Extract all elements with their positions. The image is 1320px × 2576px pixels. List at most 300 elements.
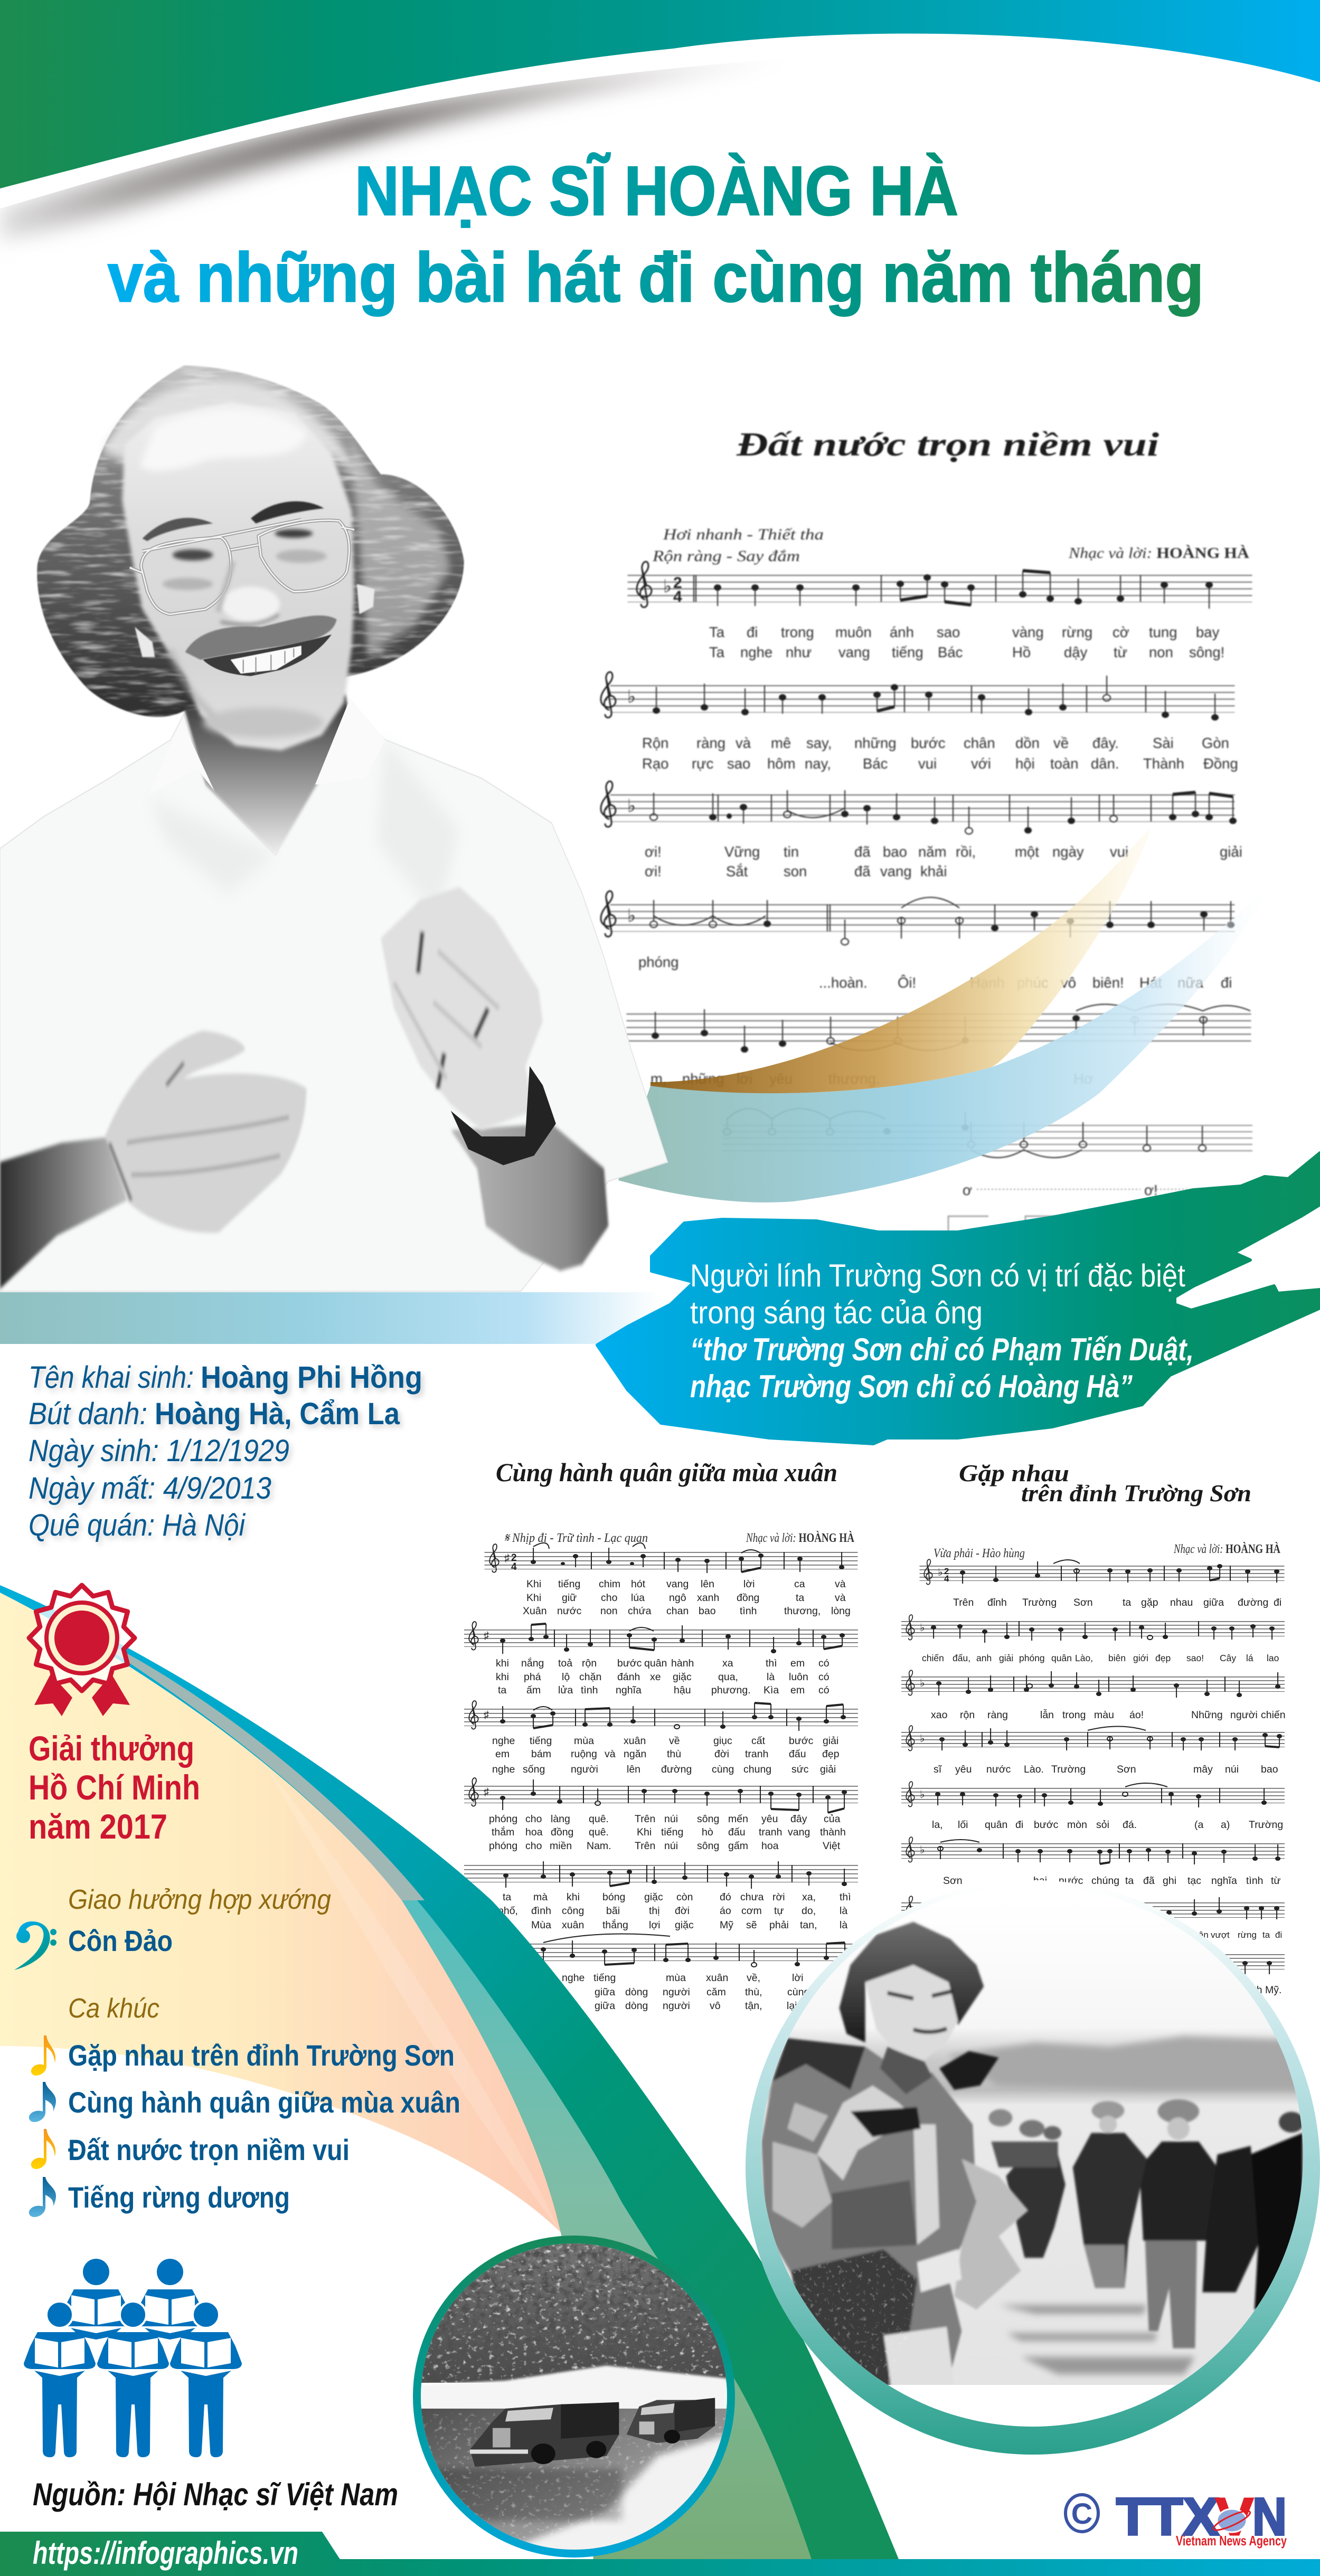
- sheet music: Gặp nhau trên đỉnh Trường Sơn: Gặp nhau: [959, 1460, 1069, 1486]
- sheet music: Đất nước trọn niềm vui: bước: [911, 735, 946, 751]
- sheet music: Cùng hành quân giữa mùa xuân: nghe: [492, 1735, 515, 1747]
- sheet music: Đất nước trọn niềm vui: Nhạc và lời: HOÀNG HÀ: [1068, 544, 1249, 562]
- sheet music: Cùng hành quân giữa mùa xuân: tiếng: [530, 1735, 552, 1747]
- sheet music: Gặp nhau trên đỉnh Trường Sơn: rừng: [1238, 1930, 1257, 1940]
- sheet music: Cùng hành quân giữa mùa xuân: tiếng: [558, 1578, 580, 1590]
- sheet music: Đất nước trọn niềm vui: dậy: [1064, 644, 1088, 660]
- sheet music: Cùng hành quân giữa mùa xuân: qua,: [718, 1671, 738, 1683]
- icon: blue note: [29, 2177, 56, 2217]
- sheet music: Gặp nhau trên đỉnh Trường Sơn: la,: [932, 1819, 943, 1831]
- sheet music: Gặp nhau trên đỉnh Trường Sơn: quân: [985, 1819, 1007, 1831]
- sheet music: Gặp nhau trên đỉnh Trường Sơn: chiến: [1261, 1709, 1286, 1721]
- sheet music: Cùng hành quân giữa mùa xuân: xuân: [624, 1735, 646, 1747]
- shirt: [0, 702, 667, 1291]
- eyes: [163, 529, 326, 590]
- agency wordmark: TTX: [1116, 2487, 1219, 2546]
- sheet music: Cùng hành quân giữa mùa xuân: đường: [661, 1764, 692, 1775]
- sheet music: Gặp nhau trên đỉnh Trường Sơn: Lào.: [1024, 1764, 1044, 1775]
- sheet music: Cùng hành quân giữa mùa xuân: lời: [743, 1578, 755, 1590]
- sheet music: Đất nước trọn niềm vui: Ta: [709, 624, 725, 640]
- sheet music: Đất nước trọn niềm vui: Hạnh: [970, 974, 1005, 991]
- sheet music: Đất nước trọn niềm vui: phúc: [1017, 974, 1049, 991]
- sheet music: Gặp nhau trên đỉnh Trường Sơn: xao: [931, 1709, 948, 1721]
- sheet music: Cùng hành quân giữa mùa xuân: vô: [710, 2000, 721, 2012]
- sheet music: Cùng hành quân giữa mùa xuân: tiếng: [661, 1826, 683, 1838]
- icon: orange note: [31, 2129, 55, 2169]
- sheet music: Cùng hành quân giữa mùa xuân: miền: [550, 1840, 572, 1852]
- sheet music: Đất nước trọn niềm vui: cờ: [1112, 624, 1129, 640]
- award text: Hồ Chí Minh: [29, 1768, 200, 1807]
- sheet music: Cùng hành quân giữa mùa xuân: bao: [699, 1605, 716, 1617]
- sheet music: Cùng hành quân giữa mùa xuân: giặc: [675, 1919, 694, 1931]
- sheet music: Gặp nhau trên đỉnh Trường Sơn: 2: [944, 1566, 949, 1576]
- sheet music: Đất nước trọn niềm vui: yêu: [769, 1071, 793, 1087]
- sheet music: Cùng hành quân giữa mùa xuân: sông: [697, 1813, 719, 1825]
- light streaks of right hair wing: [350, 439, 451, 657]
- sheet music: Cùng hành quân giữa mùa xuân: hót: [631, 1578, 646, 1590]
- sheet music: Đất nước trọn niềm vui: non: [1149, 644, 1173, 660]
- light top hair: [101, 380, 359, 478]
- sheet music: Đất nước trọn niềm vui: đã: [854, 844, 871, 860]
- sheet music: Cùng hành quân giữa mùa xuân: đẹp: [822, 1748, 840, 1760]
- sheet music: Đất nước trọn niềm vui: ♭: [627, 687, 636, 707]
- glasses: [130, 519, 354, 614]
- biography text: Hoàng Hà, Cẩm La: [155, 1397, 400, 1431]
- sheet music: Gặp nhau trên đỉnh Trường Sơn: Sơn: [1073, 1597, 1093, 1608]
- sheet music: Gặp nhau trên đỉnh Trường Sơn: giữa: [1203, 1597, 1224, 1608]
- sheet music: Cùng hành quân giữa mùa xuân: lên: [627, 1764, 640, 1775]
- left forearm: [0, 1137, 127, 1289]
- sheet music: Cùng hành quân giữa mùa xuân: thắm: [492, 1826, 514, 1838]
- sheet music: Cùng hành quân giữa mùa xuân: yêu: [761, 1813, 778, 1825]
- sheet music: Đất nước trọn niềm vui: Đất nước trọn niềm vui: [736, 425, 1159, 463]
- icon: blue note: [29, 2082, 56, 2122]
- song 2: Cùng hành quân giữa mùa xuân: [68, 2086, 460, 2119]
- sheet music: Cùng hành quân giữa mùa xuân: tận,: [745, 2000, 762, 2012]
- ears: [135, 584, 374, 657]
- sheet music: Cùng hành quân giữa mùa xuân: thì: [766, 1658, 777, 1669]
- sheet music: Cùng hành quân giữa mùa xuân: căm: [706, 1986, 726, 1998]
- sheet music: Gặp nhau trên đỉnh Trường Sơn: phóng: [1019, 1653, 1045, 1663]
- sheet music: Đất nước trọn niềm vui: Gòn: [1202, 735, 1229, 751]
- sheet music: Gặp nhau trên đỉnh Trường Sơn: ♭: [920, 1844, 925, 1856]
- sheet music: Đất nước trọn niềm vui: tiếng: [892, 644, 923, 660]
- sheet music: Cùng hành quân giữa mùa xuân: là: [840, 1905, 847, 1917]
- sheet music: Đất nước trọn niềm vui: vang: [880, 863, 912, 879]
- title: [108, 152, 1204, 316]
- sheet music: Đất nước trọn niềm vui: như: [786, 644, 812, 660]
- song list: [29, 2035, 460, 2217]
- sheet music: Cùng hành quân giữa mùa xuân: đấu: [789, 1748, 806, 1760]
- sheet music: Cùng hành quân giữa mùa xuân: hoa: [525, 1826, 543, 1838]
- face: [865, 1965, 958, 2060]
- sheet music: Cùng hành quân giữa mùa xuân: bước: [617, 1658, 642, 1669]
- sheet music: Cùng hành quân giữa mùa xuân: và: [835, 1578, 846, 1590]
- sheet music: Cùng hành quân giữa mùa xuân: chung: [743, 1764, 771, 1775]
- truck 1: [470, 2402, 619, 2467]
- sheet music: Gặp nhau trên đỉnh Trường Sơn: ♭: [938, 1567, 942, 1578]
- sheet music: Đất nước trọn niềm vui: với: [971, 755, 991, 772]
- copyright mark: C: [1071, 2497, 1092, 2530]
- sheet music: Cùng hành quân giữa mùa xuân: cho: [525, 1813, 542, 1825]
- sheet music: Đất nước trọn niềm vui: Rạo: [642, 755, 668, 772]
- sheet music: Gặp nhau trên đỉnh Trường Sơn: bao: [1261, 1764, 1278, 1775]
- sheet music: Cùng hành quân giữa mùa xuân: núi: [664, 1813, 678, 1825]
- sheet music: Gặp nhau trên đỉnh Trường Sơn: lẫn: [1040, 1709, 1054, 1721]
- sheet music: Đất nước trọn niềm vui: Rộn ràng - Say đắm: [652, 547, 800, 565]
- sheet music: Cùng hành quân giữa mùa xuân: xa,: [802, 1891, 816, 1903]
- sheet music: Gặp nhau trên đỉnh Trường Sơn: từ: [1271, 1875, 1280, 1887]
- eyebrows: [143, 501, 324, 541]
- sheet music: Đất nước trọn niềm vui: Ta: [709, 644, 725, 660]
- sheet music: Gặp nhau trên đỉnh Trường Sơn: ràng: [987, 1709, 1008, 1721]
- moustache: [185, 615, 337, 660]
- beard and smile lines: [170, 650, 324, 738]
- sheet music: Gặp nhau trên đỉnh Trường Sơn: 4: [944, 1574, 949, 1584]
- sheet music: Cùng hành quân giữa mùa xuân: 𝄋 Nhịp đi - Trữ tình - Lạc quan: [504, 1531, 648, 1545]
- quote text: trong sáng tác của ông: [690, 1295, 983, 1330]
- sheet music: Đất nước trọn niềm vui: một: [1015, 844, 1039, 860]
- sheet music: Gặp nhau trên đỉnh Trường Sơn: chúng: [1091, 1875, 1119, 1887]
- sheet music: Đất nước trọn niềm vui: chân: [964, 735, 995, 751]
- song 1: Gặp nhau trên đỉnh Trường Sơn: [68, 2039, 455, 2072]
- sheet music: Gặp nhau trên đỉnh Trường Sơn: mây: [1193, 1764, 1213, 1775]
- sheet music: Cùng hành quân giữa mùa xuân: mùa: [666, 1972, 686, 1984]
- sheet music: Cùng hành quân giữa mùa xuân: lộ: [562, 1671, 570, 1683]
- foreground soldier: [761, 1922, 1029, 2387]
- sheet music: Đất nước trọn niềm vui: sao: [727, 755, 750, 772]
- face: [122, 402, 374, 751]
- body, hair silhouette and hands: [0, 365, 667, 1291]
- sheet music: Cùng hành quân giữa mùa xuân: làng: [551, 1813, 570, 1825]
- sheet music: Cùng hành quân giữa mùa xuân: Xuân: [523, 1605, 547, 1617]
- sheet music: Đất nước trọn niềm vui: lời: [737, 1071, 752, 1087]
- sheet music: Đất nước trọn niềm vui: tin: [784, 844, 799, 860]
- icon: orange note: [31, 2035, 55, 2076]
- sheet music: Cùng hành quân giữa mùa xuân: lên: [701, 1578, 714, 1590]
- sheet music: Cùng hành quân giữa mùa xuân: cho: [601, 1592, 618, 1604]
- sheet music: Đất nước trọn niềm vui: rực: [692, 755, 714, 772]
- sheet music: Cùng hành quân giữa mùa xuân: chặn: [579, 1671, 601, 1683]
- ribbons over the score: [618, 827, 1269, 1202]
- sheet music: Cùng hành quân giữa mùa xuân: quê.: [589, 1826, 609, 1838]
- sheet music: Đất nước trọn niềm vui: ơi!: [645, 844, 662, 860]
- sheet music: Đất nước trọn niềm vui: Bác: [863, 755, 888, 772]
- sheet music: Gặp nhau trên đỉnh Trường Sơn: Sơn: [943, 1875, 963, 1887]
- soldiers photo circle: [739, 1880, 1320, 2455]
- sheet music: Gặp nhau trên đỉnh Trường Sơn: đi: [1274, 1597, 1281, 1608]
- sheet music: Gặp nhau trên đỉnh Trường Sơn: quân: [1051, 1653, 1072, 1663]
- sheet music: Cùng hành quân giữa mùa xuân: lòng: [831, 1605, 851, 1617]
- sheet music: Cùng hành quân giữa mùa xuân: tiếng: [593, 1972, 616, 1984]
- sheet music: Đất nước trọn niềm vui: vui: [918, 755, 937, 772]
- sheet music: Cùng hành quân giữa mùa xuân: đó: [720, 1891, 731, 1903]
- top curved banner: [0, 0, 1320, 240]
- sheet music: Cùng hành quân giữa mùa xuân: giục: [713, 1735, 732, 1747]
- sheet music: Gặp nhau trên đỉnh Trường Sơn: lá: [1246, 1653, 1253, 1663]
- sheet music: Gặp nhau trên đỉnh Trường Sơn: áo!: [1129, 1709, 1144, 1721]
- sheet music: Đất nước trọn niềm vui: ơ: [963, 1182, 972, 1198]
- sheet music: Cùng hành quân giữa mùa xuân: có: [818, 1658, 829, 1669]
- quote text: [690, 1258, 1194, 1404]
- portrait photo of composer Hoàng Hà: [0, 365, 667, 1291]
- sheet music: Gặp nhau trên đỉnh Trường Sơn: Trường: [1249, 1819, 1283, 1831]
- sheet music: Cùng hành quân giữa mùa xuân: bóng: [602, 1891, 625, 1903]
- sheet music: Cùng hành quân giữa mùa xuân: ta: [503, 1891, 511, 1903]
- sheet music: Cùng hành quân giữa mùa xuân: người: [663, 2000, 690, 2012]
- sheet music: Cùng hành quân giữa mùa xuân: xuân: [562, 1919, 584, 1931]
- sheet music: Cùng hành quân giữa mùa xuân: 4: [511, 1561, 517, 1573]
- sheet music: Cùng hành quân giữa mùa xuân: nắng: [521, 1657, 544, 1669]
- sheet music: Cùng hành quân giữa mùa xuân: đời: [714, 1748, 729, 1760]
- skin: [122, 402, 354, 751]
- sheet music: Cùng hành quân giữa mùa xuân: tranh: [759, 1826, 782, 1838]
- sheet music: Đất nước trọn niềm vui: Hơi nhanh - Thiết tha: [663, 526, 824, 543]
- sheet music: Đất nước trọn niềm vui: từ: [1114, 644, 1127, 660]
- sheet music: Cùng hành quân giữa mùa xuân: Mỹ: [720, 1919, 733, 1931]
- sheet music: Gặp nhau trên đỉnh Trường Sơn: a): [1221, 1819, 1230, 1831]
- sheet music: Cùng hành quân giữa mùa xuân: đánh: [617, 1671, 640, 1683]
- sheet music: Gặp nhau trên đỉnh Trường Sơn: ♭: [920, 1733, 925, 1745]
- sheet music: Cùng hành quân giữa mùa xuân: giữa: [595, 1986, 615, 1998]
- sheet music: Cùng hành quân giữa mùa xuân: chưa: [740, 1891, 764, 1903]
- sheet music: Cùng hành quân giữa mùa xuân: Nhạc và lời: HOÀNG HÀ: [746, 1531, 855, 1545]
- sheet music: Gặp nhau trên đỉnh Trường Sơn: ta: [1123, 1597, 1131, 1608]
- sheet music: Cùng hành quân giữa mùa xuân: lại: [787, 2000, 797, 2012]
- sheet music: Cùng hành quân giữa mùa xuân: Trên: [635, 1813, 655, 1825]
- sheet music: Gặp nhau trên đỉnh Trường Sơn: lối: [958, 1819, 968, 1831]
- sheet music: Đất nước trọn niềm vui: say,: [806, 735, 832, 751]
- sheet music: Cùng hành quân giữa mùa xuân: hậu: [674, 1684, 691, 1696]
- sheet music: Cùng hành quân giữa mùa xuân: xa: [722, 1658, 733, 1669]
- sheet music: Đất nước trọn niềm vui: hôm: [767, 755, 795, 772]
- sheet music: Cùng hành quân giữa mùa xuân: Trên: [635, 1840, 655, 1852]
- sheet music: Đất nước trọn niềm vui: m,: [650, 1071, 667, 1087]
- sheet music: Cùng hành quân giữa mùa xuân: về,: [747, 1972, 760, 1984]
- agency wordmark: [1116, 2487, 1287, 2546]
- sheet music: Cùng hành quân giữa mùa xuân: của: [824, 1813, 841, 1825]
- sheet music: Cùng hành quân giữa mùa xuân: rộn: [582, 1658, 597, 1669]
- sheet music: Gặp nhau trên đỉnh Trường Sơn: màu: [1094, 1709, 1114, 1721]
- collar: [149, 698, 385, 794]
- sheet music: Gặp nhau trên đỉnh Trường Sơn: Trường: [1022, 1597, 1057, 1608]
- sheet music: Cùng hành quân giữa mùa xuân: bãi: [606, 1905, 620, 1917]
- sheet music: Đất nước trọn niềm vui: ánh: [890, 624, 914, 640]
- sheet music: Cùng hành quân giữa mùa xuân: thành: [820, 1826, 846, 1838]
- sheet music: Cùng hành quân giữa mùa xuân: cùng: [712, 1764, 734, 1775]
- sheet music: Gặp nhau trên đỉnh Trường Sơn: nước: [986, 1764, 1011, 1775]
- sheet music: Cùng hành quân giữa mùa xuân: là: [840, 1919, 847, 1931]
- biography text: Ngày mất: 4/9/2013: [29, 1471, 271, 1505]
- sheet music: Đất nước trọn niềm vui: vui: [1110, 844, 1128, 860]
- sheet music: Gặp nhau trên đỉnh Trường Sơn: ghi: [1163, 1875, 1176, 1887]
- sheet music: Cùng hành quân giữa mùa xuân: Kìa: [763, 1684, 779, 1696]
- sheet music: Cùng hành quân giữa mùa xuân: Mùa: [531, 1919, 551, 1931]
- sheet music: Cùng hành quân giữa mùa xuân: cất: [751, 1735, 766, 1747]
- sheet music: Cùng hành quân giữa mùa xuân: em: [790, 1684, 805, 1696]
- sheet music: Gặp nhau trên đỉnh Trường Sơn: ♭: [920, 1903, 925, 1915]
- sheet music: Đất nước trọn niềm vui: những: [854, 735, 897, 751]
- sheet music: Đất nước trọn niềm vui: ngày: [1052, 844, 1084, 860]
- marching soldiers in background: [988, 2099, 1304, 2348]
- quote text: Người lính Trường Sơn có vị trí đặc biệt: [690, 1258, 1185, 1293]
- sheet music: Cùng hành quân giữa mùa xuân: nước: [557, 1605, 582, 1617]
- sheet music: Cùng hành quân giữa mùa xuân: chứa: [628, 1605, 652, 1617]
- sheet music: Gặp nhau trên đỉnh Trường Sơn: đá.: [1123, 1819, 1137, 1831]
- sheet music: Cùng hành quân giữa mùa xuân: lửa: [558, 1684, 573, 1696]
- sheet music: Gặp nhau trên đỉnh Trường Sơn: ♭: [920, 1678, 925, 1689]
- copyright mark: [1066, 2495, 1098, 2532]
- sheet music: Gặp nhau trên đỉnh Trường Sơn: nước: [1059, 1875, 1083, 1887]
- sheet music: Đất nước trọn niềm vui: 2: [673, 574, 682, 592]
- sheet music: Cùng hành quân giữa mùa xuân: quân: [644, 1658, 667, 1669]
- sheet music: Cùng hành quân giữa mùa xuân: xuân: [706, 1972, 728, 1984]
- sheet music: Cùng hành quân giữa mùa xuân: bám: [531, 1748, 551, 1760]
- sheet music: Cùng hành quân giữa mùa xuân: ♯: [484, 1709, 489, 1721]
- sheet music: Đất nước trọn niềm vui: Vững: [724, 844, 760, 860]
- teal to green main sweep: [0, 1585, 899, 2560]
- sheet music: Đất nước trọn niềm vui: dân.: [1091, 755, 1119, 772]
- sheet music: Đất nước trọn niềm vui: những: [682, 1071, 724, 1087]
- sheet music: Gặp nhau trên đỉnh Trường Sơn: núi: [1225, 1764, 1239, 1775]
- sheet music: Cùng hành quân giữa mùa xuân: giải: [820, 1764, 836, 1775]
- sheet music: Đất nước trọn niềm vui: mê: [771, 735, 791, 751]
- sheet music: Cùng hành quân giữa mùa xuân: giải: [823, 1735, 838, 1747]
- sheet music: Cùng hành quân giữa mùa xuân: Nam.: [587, 1840, 611, 1852]
- sheet music: Gặp nhau trên đỉnh Trường Sơn: đã: [1143, 1875, 1155, 1887]
- sheet music: Cùng hành quân giữa mùa xuân: xanh: [697, 1592, 719, 1604]
- nose: [218, 561, 280, 624]
- title: và những bài hát đi cùng năm tháng: [108, 239, 1204, 316]
- biography text: Quê quán: Hà Nội: [29, 1508, 246, 1542]
- sheet music: Đất nước trọn niềm vui: ♭: [627, 796, 636, 816]
- sheet music: Cùng hành quân giữa mùa xuân: hành: [671, 1658, 694, 1669]
- sheet music: Đất nước trọn niềm vui: Hát: [1139, 974, 1162, 991]
- icon: choir: [24, 2259, 242, 2457]
- sheet music: Gặp nhau trên đỉnh Trường Sơn: Trường: [1051, 1764, 1086, 1775]
- sheet music: Đất nước trọn niềm vui: rồi,: [956, 844, 976, 860]
- truck photo circle: [404, 2236, 758, 2559]
- sheet music: Cùng hành quân giữa mùa xuân: và: [605, 1748, 616, 1760]
- sheet music: Cùng hành quân giữa mùa xuân: cho: [525, 1840, 542, 1852]
- sheet music: Đất nước trọn niềm vui: về: [1053, 735, 1069, 751]
- sheet music: Gặp nhau trên đỉnh Trường Sơn: trong: [1062, 1709, 1086, 1721]
- sheet music: Gặp nhau trên đỉnh Trường Sơn: anh Mỹ.: [1245, 1984, 1281, 1996]
- agency name: Vietnam News Agency: [1176, 2533, 1287, 2549]
- sheet music: Cùng hành quân giữa mùa xuân: mà: [533, 1891, 548, 1903]
- sheet music: Cùng hành quân giữa mùa xuân: là: [767, 1671, 775, 1683]
- sheet music: Đất nước trọn niềm vui: đây.: [1092, 735, 1119, 751]
- sheet music: Cùng hành quân giữa mùa xuân: thị: [649, 1905, 660, 1917]
- sheet music: Cùng hành quân giữa mùa xuân: phố,: [498, 1905, 518, 1917]
- sheet music: Cùng hành quân giữa mùa xuân: giặc: [644, 1891, 663, 1903]
- sheet music: Cùng hành quân giữa mùa xuân: đồng: [737, 1592, 759, 1604]
- sheet music: Đất nước trọn niềm vui: ơi!: [645, 863, 662, 879]
- sheet music: Đất nước trọn niềm vui: Thành: [1143, 755, 1184, 772]
- sheet music: Cùng hành quân giữa mùa xuân: ruộng: [571, 1748, 597, 1760]
- sheet music: Gặp nhau trên đỉnh Trường Sơn: Sơn: [1117, 1764, 1136, 1775]
- sheet music: Cùng hành quân giữa mùa xuân: hò: [702, 1826, 713, 1838]
- sheet music: Cùng hành quân giữa mùa xuân: sức: [791, 1764, 809, 1775]
- sheet music: Cùng hành quân giữa mùa xuân: ♯: [484, 1786, 489, 1798]
- sheet music: Gặp nhau trên đỉnh Trường Sơn: vượt: [1211, 1930, 1230, 1940]
- sheet music: Đất nước trọn niềm vui: tung: [1149, 624, 1177, 640]
- sheet music: Gặp nhau trên đỉnh Trường Sơn: ta: [1125, 1875, 1134, 1887]
- quote brush stroke: [597, 1153, 1320, 1444]
- wristwatch strap: [451, 1066, 556, 1165]
- sheet music: Cùng hành quân giữa mùa xuân: thù,: [745, 1986, 762, 1998]
- sheet music: Cùng hành quân giữa mùa xuân: em: [790, 1658, 805, 1669]
- sheet music: Gặp nhau trên đỉnh Trường Sơn: sĩ: [934, 1764, 942, 1775]
- sheet music: Cùng hành quân giữa mùa xuân: phóng: [489, 1813, 517, 1825]
- sheet music: Cùng hành quân giữa mùa xuân: bước: [789, 1735, 814, 1747]
- sheet music: Đất nước trọn niềm vui: nữa: [1177, 974, 1204, 991]
- song: Côn Đảo: Côn Đảo: [68, 1924, 173, 1957]
- sheet music: Gặp nhau trên đỉnh Trường Sơn: tình: [1246, 1875, 1264, 1887]
- left decorative swoosh: [0, 1585, 899, 2560]
- biography text: Hoàng Phi Hồng: [201, 1360, 422, 1395]
- sheet music: Cùng hành quân giữa mùa xuân: tình: [581, 1684, 598, 1696]
- award text: Giải thưởng: [29, 1729, 194, 1768]
- sheet music: Đất nước trọn niềm vui: thương.: [828, 1071, 880, 1087]
- sheet music: Đất nước trọn niềm vui: ♭: [627, 906, 636, 926]
- sheet music: Cùng hành quân giữa mùa xuân: phá: [524, 1671, 541, 1683]
- sheet music: Cùng hành quân giữa mùa xuân: dòng: [625, 1986, 648, 1998]
- sheet music: Cùng hành quân giữa mùa xuân: đồng: [551, 1826, 573, 1838]
- sheet music: Đất nước trọn niềm vui: đi: [747, 624, 758, 640]
- sheet music: Gặp nhau trên đỉnh Trường Sơn: [906, 1460, 1286, 1996]
- sheet music: Gặp nhau trên đỉnh Trường Sơn: trên đỉnh Trường Sơn: [1021, 1480, 1251, 1507]
- sheet music: Đất nước trọn niềm vui: [601, 425, 1250, 1235]
- sheet music: Đất nước trọn niềm vui: rừng: [1062, 624, 1092, 640]
- sheet music: Gặp nhau trên đỉnh Trường Sơn: giải: [999, 1653, 1013, 1663]
- sheet music: Gặp nhau trên đỉnh Trường Sơn: mòn: [1067, 1819, 1087, 1831]
- sheet music: Cùng hành quân giữa mùa xuân: rời: [772, 1891, 785, 1903]
- sheet music: Cùng hành quân giữa mùa xuân: ca: [794, 1578, 805, 1590]
- sheet music: Cùng hành quân giữa mùa xuân: mến: [728, 1813, 748, 1825]
- sheet music: Gặp nhau trên đỉnh Trường Sơn: ♭: [920, 1789, 925, 1801]
- sheet music: Gặp nhau trên đỉnh Trường Sơn: sao!: [1186, 1653, 1204, 1663]
- sheet music: Cùng hành quân giữa mùa xuân: phóng: [489, 1840, 517, 1852]
- sheet music: Gặp nhau trên đỉnh Trường Sơn: ta: [1262, 1930, 1270, 1940]
- right fist: [381, 887, 543, 1130]
- sheet music: Gặp nhau trên đỉnh Trường Sơn: anh: [976, 1653, 992, 1663]
- sheet music: Cùng hành quân giữa mùa xuân: Khi: [526, 1592, 541, 1604]
- sheet music: Đất nước trọn niềm vui: năm: [918, 844, 946, 860]
- sheet music: Gặp nhau trên đỉnh Trường Sơn: Cây: [1220, 1653, 1236, 1663]
- sheet music: Cùng hành quân giữa mùa xuân: thắng: [602, 1919, 628, 1931]
- sheet music: Gặp nhau trên đỉnh Trường Sơn: tạc: [1187, 1875, 1201, 1887]
- sheet music: Gặp nhau trên đỉnh Trường Sơn: sỏi: [1096, 1819, 1109, 1831]
- sheet music: Cùng hành quân giữa mùa xuân: ♯: [504, 1552, 510, 1564]
- sheet music: Cùng hành quân giữa mùa xuân: giặc: [673, 1671, 692, 1683]
- sheet music: Gặp nhau trên đỉnh Trường Sơn: đường: [1238, 1597, 1268, 1608]
- sheet music: Gặp nhau trên đỉnh Trường Sơn: Những: [1191, 1709, 1223, 1721]
- sheet music: Gặp nhau trên đỉnh Trường Sơn: Trên: [953, 1597, 974, 1608]
- sheet music: Cùng hành quân giữa mùa xuân: sống: [523, 1764, 545, 1775]
- award text: [29, 1729, 200, 1846]
- sheet music: Đất nước trọn niềm vui: trong: [781, 624, 814, 640]
- forehead highlight: [140, 409, 306, 471]
- sheet music: Cùng hành quân giữa mùa xuân: tan,: [800, 1919, 817, 1931]
- sheet music: Đất nước trọn niềm vui: bay: [1196, 624, 1220, 640]
- sheet music: Gặp nhau trên đỉnh Trường Sơn: lao: [1267, 1653, 1279, 1663]
- sheet music: Cùng hành quân giữa mùa xuân: nghĩa: [616, 1684, 642, 1696]
- sheet music: Đất nước trọn niềm vui: hội: [1015, 755, 1035, 772]
- quote text: “thơ Trường Sơn chỉ có Phạm Tiến Duật,: [690, 1332, 1194, 1367]
- sheet music: Cùng hành quân giữa mùa xuân: luôn: [789, 1671, 808, 1683]
- sheet music: Gặp nhau trên đỉnh Trường Sơn: gặp: [1141, 1597, 1158, 1608]
